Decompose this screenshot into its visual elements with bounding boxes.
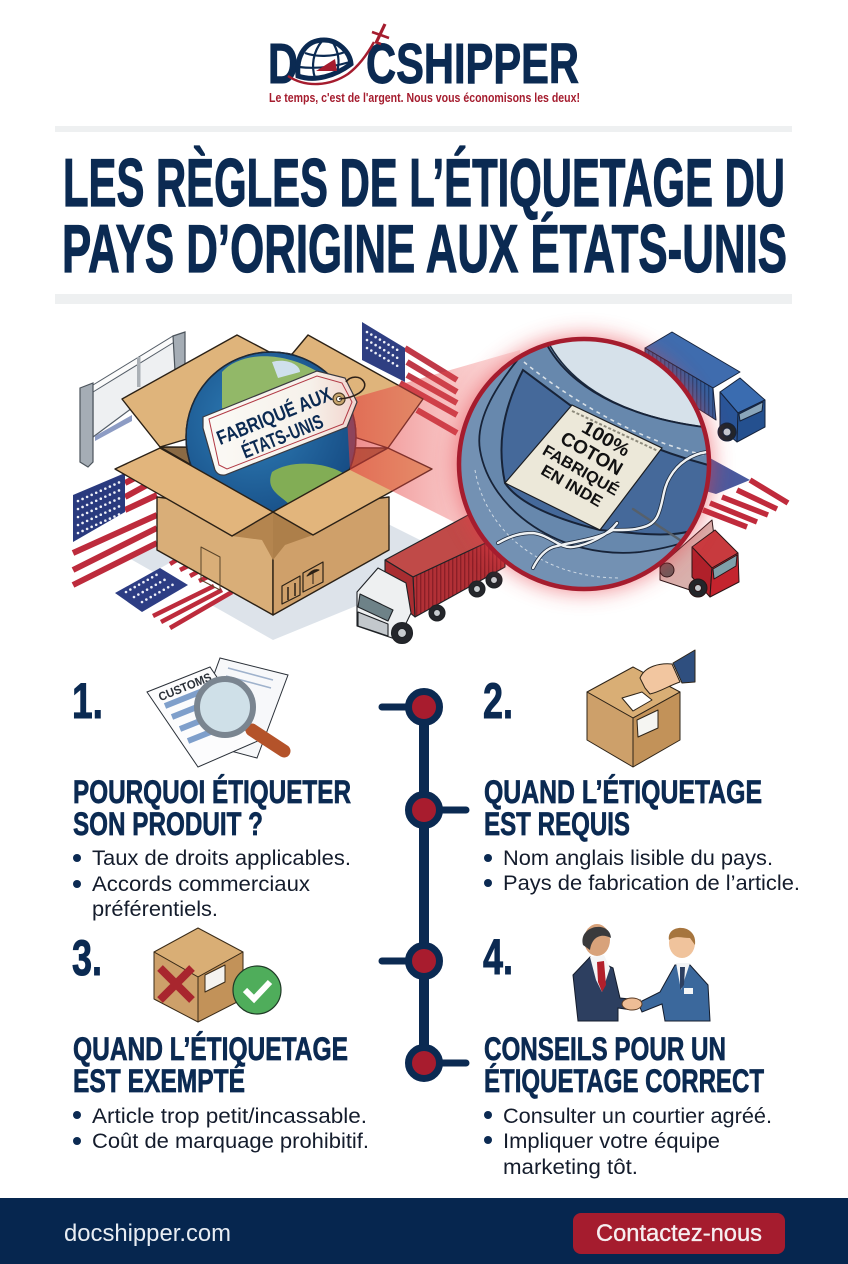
- heading: [484, 774, 762, 842]
- contact button: [573, 1213, 785, 1254]
- hero illustration: [73, 322, 788, 644]
- timeline connector: [382, 692, 466, 1078]
- box back flaps: [122, 335, 423, 512]
- heading: EST REQUIS: [484, 806, 630, 842]
- panel 4: conseils pour un étiquetage correct: [483, 924, 772, 1179]
- heading: [73, 774, 351, 842]
- bullet list: Article trop petit/incassable.: [92, 1105, 367, 1128]
- woven label: 100%: [578, 417, 633, 461]
- collar band: [479, 345, 712, 553]
- bullet list: Accords commerciaux: [92, 873, 311, 896]
- heading: QUAND L’ÉTIQUETAGE: [484, 774, 762, 810]
- title: [62, 145, 787, 287]
- logo wordmark: D: [268, 32, 298, 96]
- panel 3: quand l'étiquetage est exempté: [72, 928, 369, 1153]
- bullet list: [484, 847, 800, 895]
- panel 1: pourquoi étiqueter: [72, 658, 351, 921]
- bullet list: [73, 1105, 369, 1153]
- truck: white cab with red container: [357, 514, 505, 644]
- number 1: 1.: [72, 673, 103, 729]
- woven label: EN INDE: [538, 462, 605, 511]
- heading: [73, 1031, 348, 1099]
- loose thread: [498, 452, 707, 568]
- heading: EST EXEMPTÉ: [73, 1063, 245, 1099]
- bullet list: Nom anglais lisible du pays.: [503, 847, 773, 870]
- icon: customs documents with magnifier: CUSTOMS: [156, 670, 214, 704]
- heading: CONSEILS POUR UN: [484, 1031, 726, 1067]
- box front flaps: [115, 448, 432, 536]
- truck: blue, upper right: [645, 332, 765, 442]
- red projection beam: [346, 350, 520, 555]
- woven label: COTON: [557, 428, 626, 480]
- magnifier: shirt label detail: [459, 330, 712, 589]
- logo wordmark: [268, 32, 579, 96]
- icon: open cardboard box: [115, 335, 432, 615]
- heading: [484, 1031, 764, 1099]
- flag: right: [702, 457, 788, 527]
- ground shadow: [127, 520, 460, 640]
- number 4: 4.: [483, 929, 513, 985]
- icon: display panel frame: [80, 332, 185, 467]
- flag: upper centre: [362, 322, 457, 433]
- heading: POURQUOI ÉTIQUETER: [73, 774, 351, 810]
- heading: ÉTIQUETAGE CORRECT: [484, 1063, 764, 1099]
- neck opening: [501, 370, 712, 534]
- bullet list: [484, 1105, 772, 1179]
- tag: fabriqué aux états-unis: ÉTATS-UNIS: [238, 410, 327, 463]
- woven label: [505, 405, 662, 530]
- panel 2: quand l'étiquetage est requis: [483, 650, 800, 895]
- bullet list: Coût de marquage prohibitif.: [92, 1130, 369, 1153]
- heading: QUAND L’ÉTIQUETAGE: [73, 1031, 348, 1067]
- number 3: 3.: [72, 930, 102, 986]
- logo wordmark: CSHIPPER: [366, 32, 579, 96]
- website: docshipper.com: [64, 1220, 231, 1247]
- icon: two people shaking hands: [573, 924, 710, 1021]
- footer bar: [0, 1198, 848, 1264]
- tag: fabriqué aux états-unis: FABRIQUÉ AUX: [213, 383, 336, 450]
- box body: [157, 497, 389, 615]
- number 2: 2.: [483, 673, 513, 729]
- tag: fabriqué aux états-unis: [203, 371, 365, 475]
- bullet list: Impliquer votre équipe: [503, 1130, 720, 1153]
- bullet list: marketing tôt.: [503, 1156, 638, 1179]
- flag: left: [73, 473, 157, 587]
- logo: [268, 24, 580, 105]
- logo globe: [298, 40, 351, 78]
- heading: SON PRODUIT ?: [73, 806, 263, 842]
- woven label: FABRIQUÉ: [539, 441, 623, 500]
- bullet list: Taux de droits applicables.: [92, 847, 351, 870]
- bullet list: [73, 847, 351, 921]
- magnifier glow: [456, 336, 712, 592]
- logo tagline: Le temps, c'est de l'argent. Nous vous économisons les deux!: [269, 90, 580, 105]
- logo swoosh and plane: [288, 24, 389, 84]
- bullet list: Consulter un courtier agréé.: [503, 1105, 772, 1128]
- truck: red, lower right: [660, 520, 739, 597]
- contact button: Contactez-nous: [596, 1220, 762, 1247]
- icon: hand placing label on box: [587, 650, 695, 767]
- globe: [186, 352, 356, 522]
- icon: box with cross and check: [154, 928, 281, 1022]
- icon: customs documents with magnifier: [147, 658, 288, 767]
- bullet list: préférentiels.: [92, 898, 218, 921]
- pale background: [550, 341, 700, 426]
- flag: on the ground: [115, 558, 232, 629]
- bullet list: Pays de fabrication de l’article.: [503, 872, 800, 895]
